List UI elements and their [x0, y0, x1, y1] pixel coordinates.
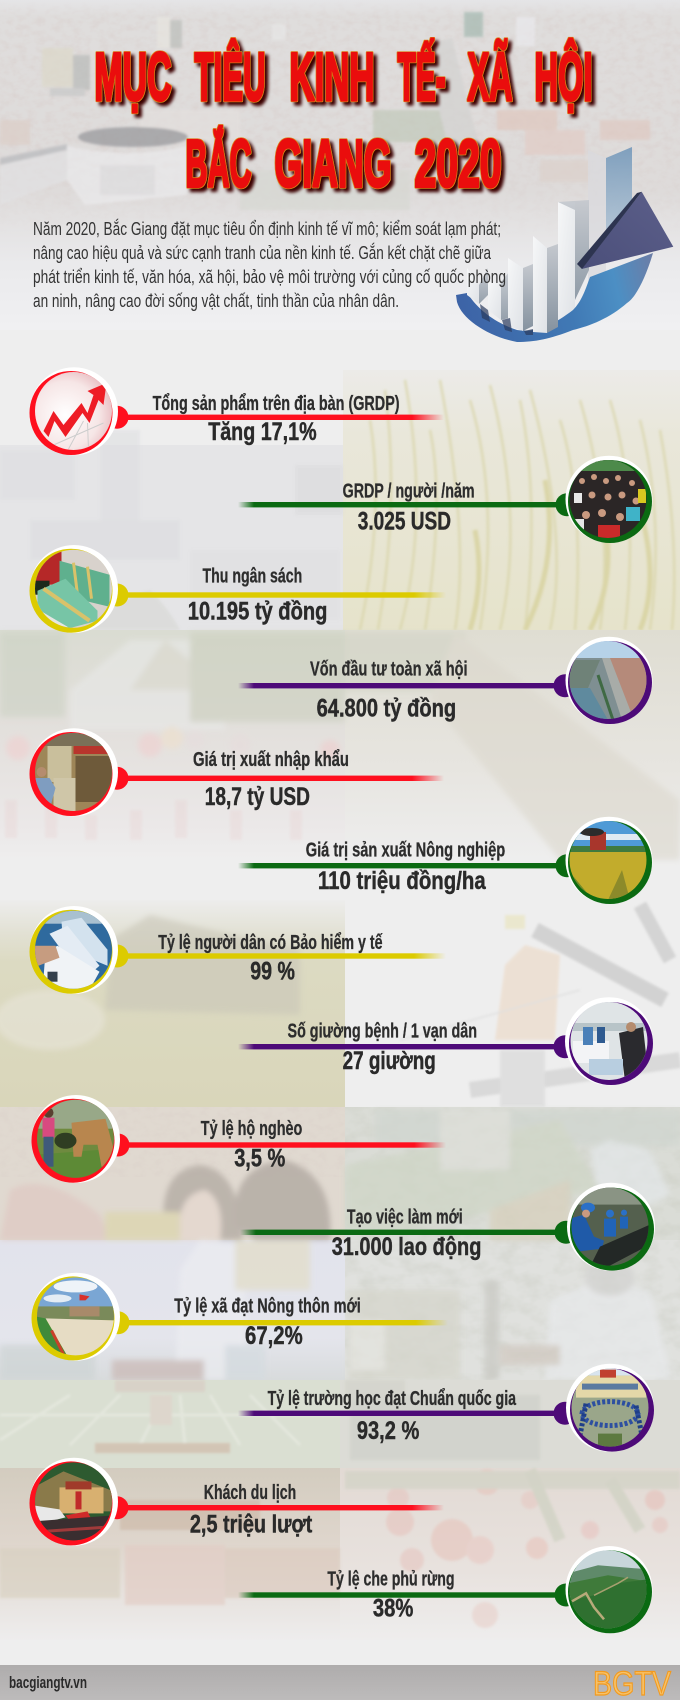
item: import-export: [30, 728, 444, 816]
label: Tổng sản phẩm trên địa bàn (GRDP): [153, 393, 400, 415]
item: tourists: [30, 1458, 444, 1546]
item: poverty rate: [32, 1095, 446, 1183]
photo circle: cow: [32, 1095, 120, 1183]
connector: [106, 1134, 446, 1156]
title: 2020: [414, 126, 502, 202]
connector: [106, 767, 444, 790]
intro text: Năm 2020, Bắc Giang đặt mục tiêu ổn định kinh tế vĩ mô; kiểm soát lạm phát;: [33, 218, 501, 239]
label: Vốn đầu tư toàn xã hội: [310, 659, 468, 681]
item: forest cover: [238, 1546, 652, 1633]
connector: [238, 674, 576, 697]
label: Tỷ lệ hộ nghèo: [201, 1118, 302, 1140]
label: Tỷ lệ người dân có Bảo hiểm y tế: [158, 932, 383, 954]
text: HỘI: [534, 38, 592, 115]
intro text: [33, 218, 506, 311]
photo circle: insurance cards: [30, 906, 118, 994]
photo circle: warehouse: [30, 728, 118, 816]
intro text: phát triển kinh tế, văn hóa, xã hội, bảo vệ môi trường với củng cố quốc phòng: [33, 267, 506, 287]
label: Giá trị xuất nhập khẩu: [193, 749, 349, 771]
photo circle: school: [566, 1364, 654, 1452]
photo circle: city: [566, 637, 652, 724]
item: national standard schools: [238, 1364, 654, 1452]
photo circle: hospital room: [565, 997, 653, 1085]
title: KINH: [290, 39, 374, 115]
label: Khách du lịch: [204, 1482, 296, 1504]
label: Tạo việc làm mới: [347, 1206, 463, 1228]
label: Tỷ lệ xã đạt Nông thôn mới: [174, 1295, 361, 1317]
title: BẮC: [186, 126, 252, 202]
connector: [106, 584, 446, 606]
label: Tỷ lệ trường học đạt Chuẩn quốc gia: [268, 1388, 517, 1410]
value: 31.000 lao động: [332, 1233, 481, 1261]
source site: bacgiangtv.vn: [9, 1673, 87, 1692]
value: Tăng 17,1%: [208, 418, 317, 446]
item: hospital beds: [238, 997, 653, 1085]
value: 2,5 triệu lượt: [190, 1510, 313, 1538]
value: 64.800 tỷ đồng: [317, 695, 456, 723]
connector: [238, 1035, 576, 1058]
title: MỤC: [94, 39, 172, 115]
connector: [106, 1311, 448, 1334]
connector: [106, 406, 444, 429]
label: Thu ngân sách: [202, 566, 302, 588]
photo circle: crowd: [566, 456, 652, 543]
title: XÃ: [468, 39, 512, 115]
photo circle: growth chart: [30, 367, 118, 455]
item: GRDP: [30, 367, 444, 455]
tall bars behind arrow: [558, 147, 632, 323]
value: 99 %: [250, 957, 295, 985]
value: 3,5 %: [234, 1145, 285, 1173]
connector: [238, 1402, 576, 1425]
title: TẾ-: [398, 38, 446, 115]
value: 18,7 tỷ USD: [205, 783, 310, 811]
value: 93,2 %: [357, 1417, 419, 1445]
label: Số giường bệnh / 1 vạn dân: [288, 1020, 477, 1042]
connector: [240, 1221, 578, 1244]
rising bars: [467, 236, 558, 335]
value: 110 triệu đồng/ha: [318, 867, 487, 895]
title: GIANG: [274, 126, 392, 202]
connector: [238, 1584, 578, 1606]
value: 10.195 tỷ đồng: [188, 597, 327, 625]
value: 67,2%: [245, 1322, 303, 1350]
photo circle: temple festival: [30, 1458, 118, 1546]
photo circle: forest: [566, 1546, 652, 1633]
photo circle: village road: [32, 1273, 120, 1361]
label: Giá trị sản xuất Nông nghiệp: [306, 840, 505, 862]
connector: [106, 944, 446, 968]
value: 3.025 USD: [358, 507, 451, 535]
item: budget revenue: [30, 545, 446, 633]
item: social investment: [238, 637, 652, 724]
connector: [106, 1496, 444, 1519]
intro text: nâng cao hiệu quả và sức cạnh tranh của nền kinh tế. Gắn kết chặt chẽ giữa: [33, 242, 492, 263]
label: Tỷ lệ che phủ rừng: [327, 1569, 454, 1591]
value: 38%: [373, 1595, 413, 1623]
item: new jobs: [240, 1183, 655, 1271]
connector: [238, 854, 578, 877]
item: GRDP per capita: [238, 456, 652, 543]
item: health insurance: [30, 906, 446, 994]
arrow head: [577, 192, 673, 269]
connector: [238, 493, 578, 516]
title: TIÊU: [194, 38, 266, 115]
item: agricultural output: [238, 817, 652, 904]
arrow body: [456, 253, 653, 342]
label: GRDP / người /năm: [343, 480, 475, 502]
value: 27 giường: [343, 1047, 436, 1075]
chart with rising arrow: [456, 147, 673, 342]
item: new rural communes: [32, 1273, 448, 1361]
photo circle: factory workers: [567, 1183, 655, 1271]
title: [94, 38, 592, 202]
photo circle: rice harvest: [566, 817, 652, 904]
photo circle: money: [30, 545, 118, 633]
intro text: an ninh, nâng cao đời sống vật chất, tinh thần của nhân dân.: [33, 291, 399, 311]
footer bar: [0, 1665, 680, 1700]
